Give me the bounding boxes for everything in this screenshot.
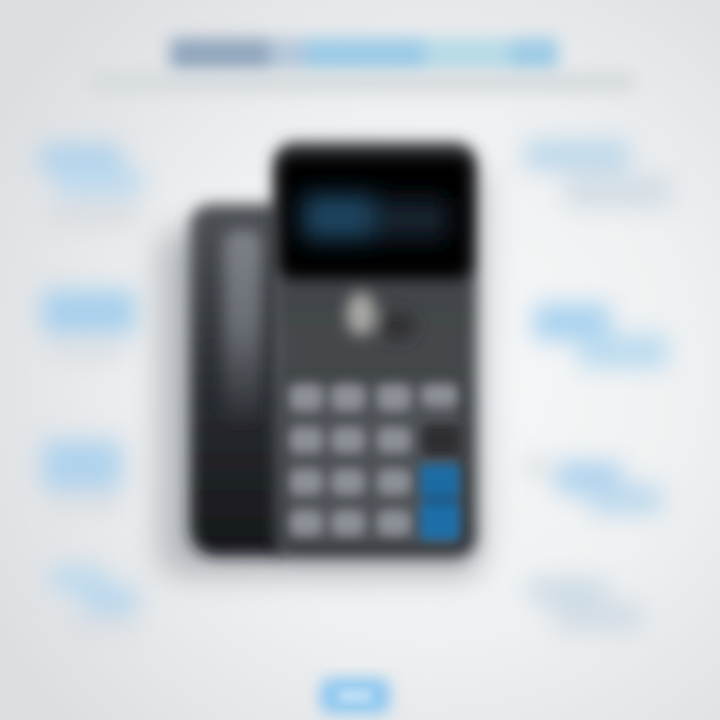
dark function key [422, 424, 460, 456]
navigation button [346, 292, 416, 341]
feature: left 2 [42, 290, 136, 360]
title [170, 38, 558, 72]
feature: left 4 [50, 566, 138, 634]
screen display glow [302, 194, 448, 240]
feature: right 2 [534, 304, 668, 368]
blue call keys [420, 464, 460, 540]
subtitle [90, 72, 635, 92]
desk phone [190, 142, 477, 558]
keypad [286, 382, 458, 544]
feature: right 3 [526, 458, 662, 514]
button pill [320, 678, 390, 714]
left feature column [40, 144, 143, 634]
phone shadow [160, 170, 488, 575]
icon: handset [190, 204, 285, 556]
feature: left 1 [40, 144, 143, 226]
phone body [273, 142, 477, 558]
phone screen [280, 156, 470, 278]
handset highlight [224, 230, 262, 420]
feature: right 1 [524, 140, 672, 208]
feature: left 3 [42, 440, 122, 512]
keypad rows [290, 384, 458, 535]
feature: right 4 [528, 578, 642, 632]
button label [338, 690, 372, 702]
right feature column [524, 140, 672, 632]
bottom call-to-action button [320, 678, 390, 714]
